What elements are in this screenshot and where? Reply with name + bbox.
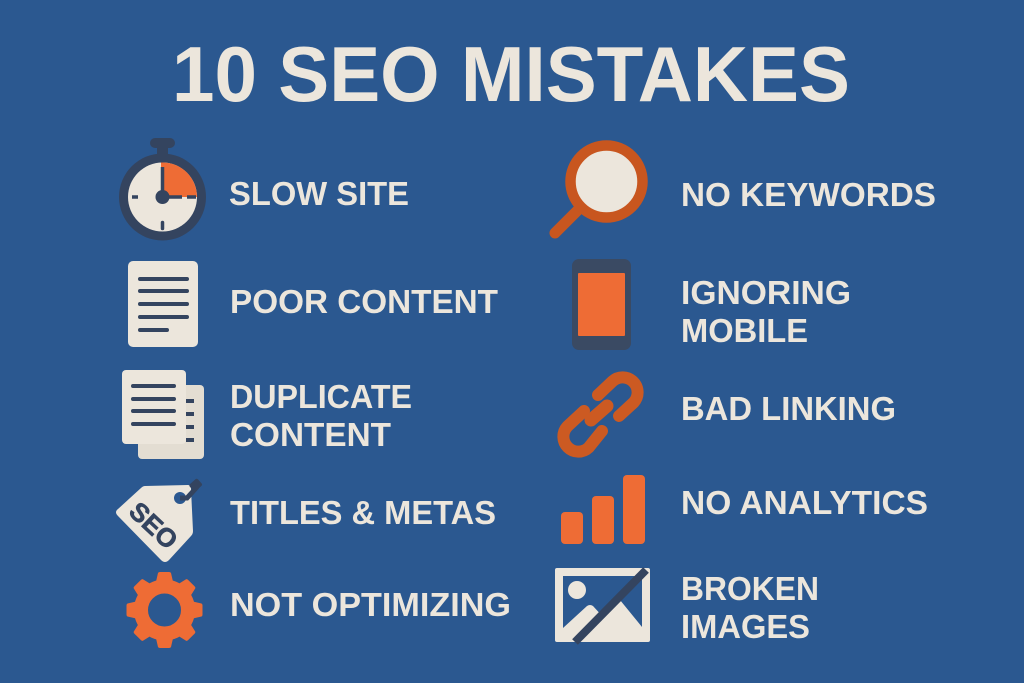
icon: magnifying glass [555, 146, 642, 233]
icon: SEO tag: SEO [123, 496, 184, 555]
icon: broken image [555, 568, 650, 642]
label: no keywords: NO KEYWORDS [681, 176, 936, 213]
label: not optimizing: NOT OPTIMIZING [230, 586, 511, 623]
icon: document [128, 261, 198, 347]
label: broken images: BROKEN [681, 570, 819, 607]
label: ignoring mobile: IGNORING [681, 274, 851, 311]
label: broken images [681, 570, 819, 645]
label: duplicate content: CONTENT [230, 416, 391, 453]
label: ignoring mobile: MOBILE [681, 312, 808, 349]
title: 10 SEO MISTAKES [172, 30, 850, 118]
label: slow site: SLOW SITE [229, 175, 409, 212]
label: bad linking: BAD LINKING [681, 390, 896, 427]
label: broken images: IMAGES [681, 608, 810, 645]
label: duplicate content: DUPLICATE [230, 378, 412, 415]
icon: SEO tag [116, 478, 203, 562]
icon: stopwatch [119, 138, 206, 240]
label: no analytics: NO ANALYTICS [681, 484, 928, 521]
icon: chain link [563, 377, 638, 452]
label: titles and metas: TITLES & METAS [230, 494, 496, 531]
icon: bar chart [561, 475, 645, 544]
icon: duplicate documents [122, 370, 204, 459]
label: ignoring mobile [681, 274, 851, 349]
icon: mobile phone [572, 259, 631, 350]
icon: gear [126, 572, 202, 648]
label: duplicate content [230, 378, 412, 453]
label: poor content: POOR CONTENT [230, 283, 498, 320]
